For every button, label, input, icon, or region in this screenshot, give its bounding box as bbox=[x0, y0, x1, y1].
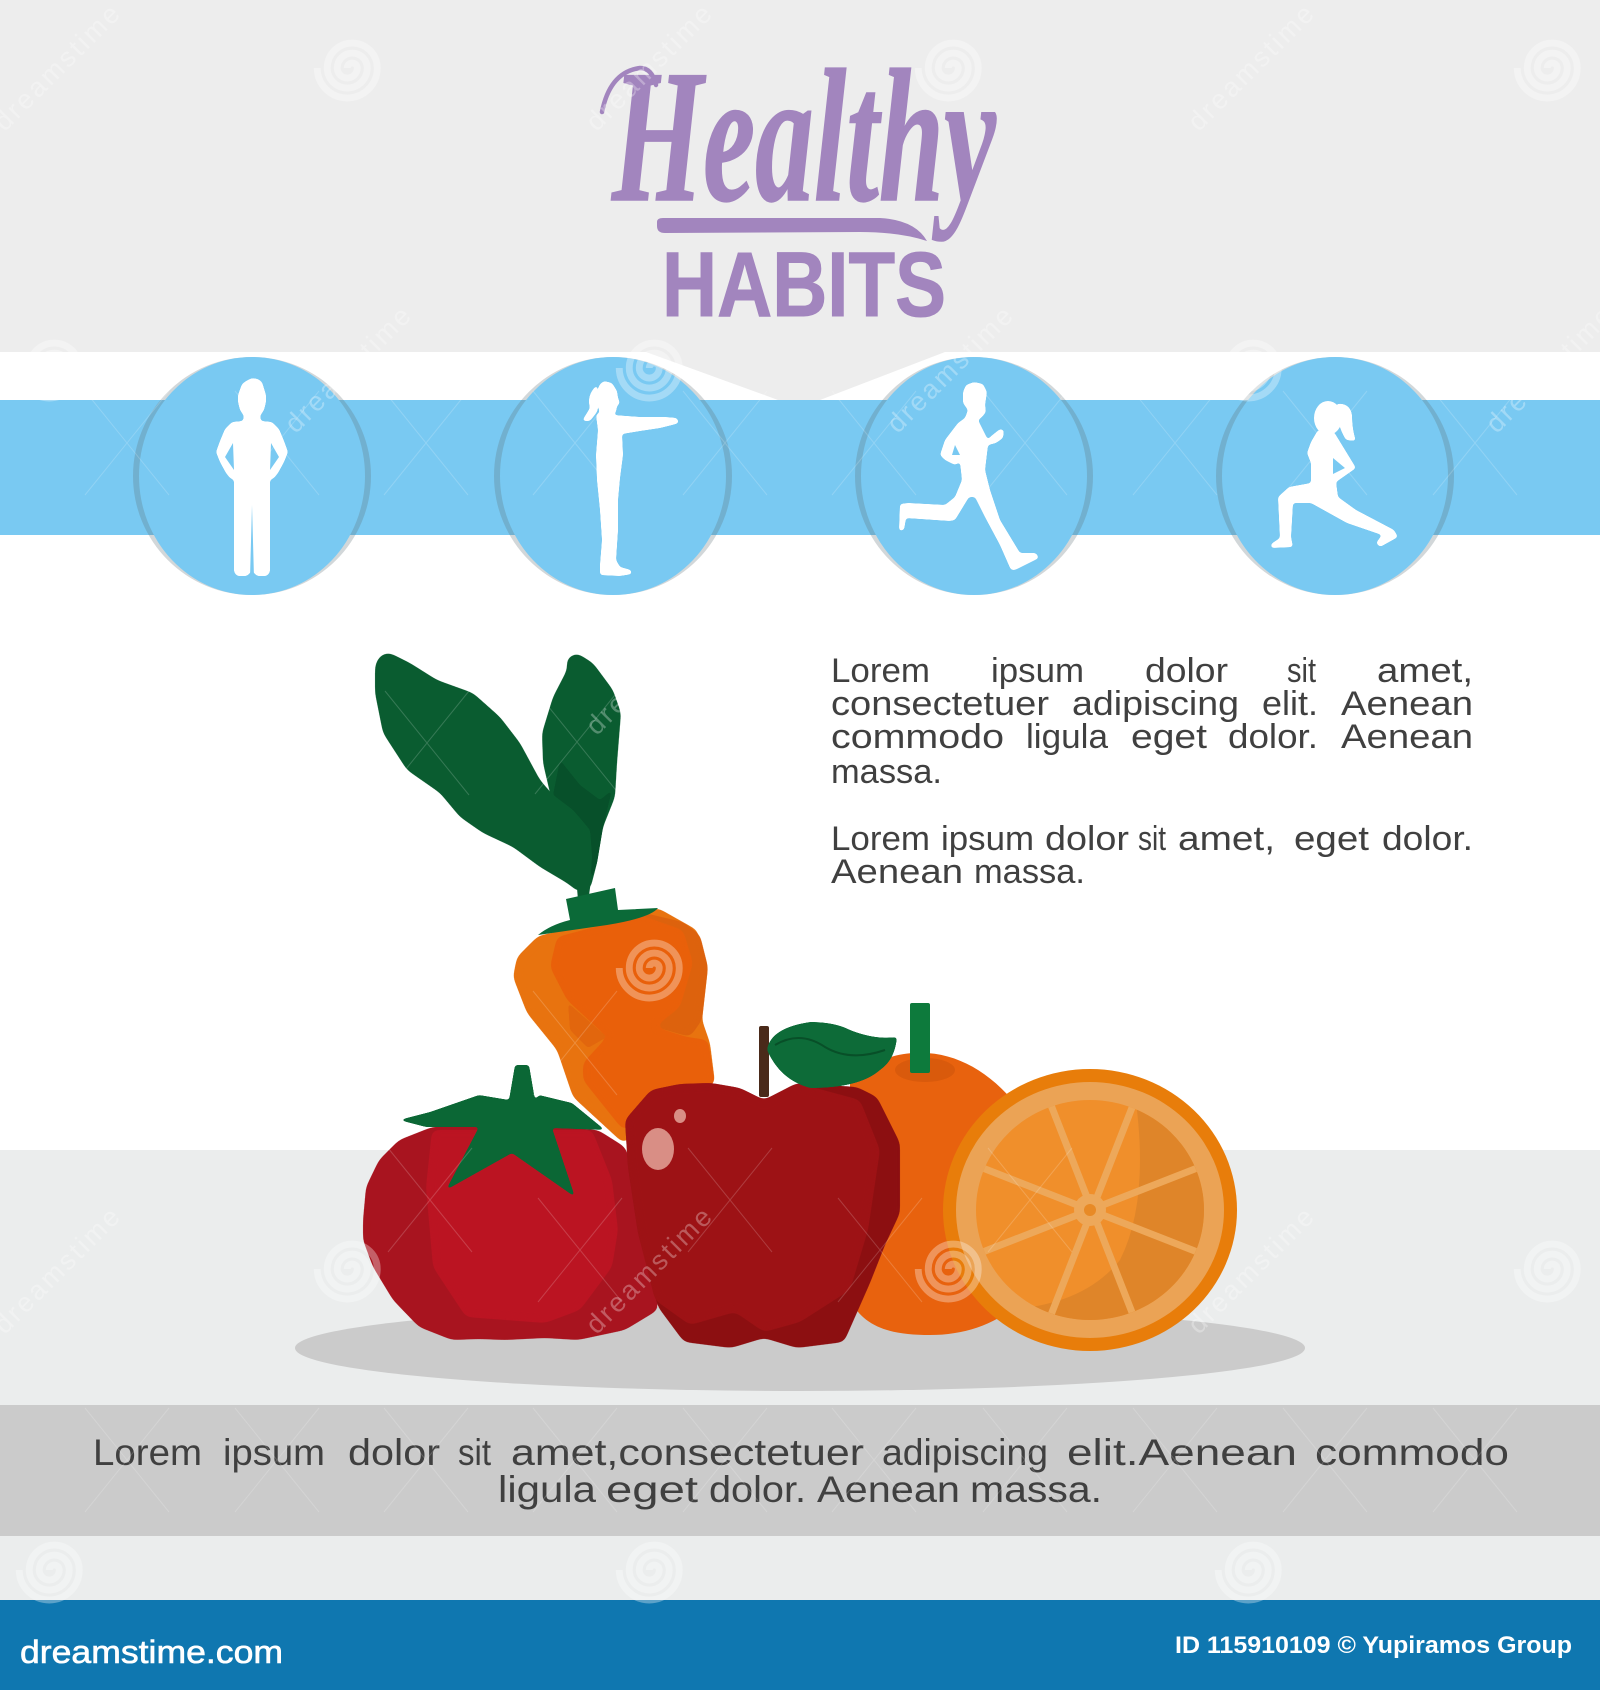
tomato leaves and stem bbox=[399, 1065, 605, 1197]
icon: woman with arms forward bbox=[494, 357, 732, 595]
text block: upper paragraph: sit bbox=[1287, 652, 1316, 690]
caption text: dolor bbox=[348, 1432, 440, 1473]
text block: upper paragraph: Aenean bbox=[1341, 718, 1473, 756]
title bbox=[602, 32, 996, 336]
illustration: apple bbox=[625, 1022, 900, 1348]
caption text: commodo bbox=[1315, 1432, 1509, 1473]
carrot left leaf bbox=[375, 653, 592, 893]
caption text: eget bbox=[606, 1469, 699, 1510]
carrot body bbox=[513, 908, 715, 1143]
caption text: Lorem bbox=[93, 1432, 202, 1473]
text block: upper paragraph bbox=[831, 652, 1473, 791]
caption text: elit.Aenean bbox=[1067, 1432, 1297, 1473]
text block: lower paragraph: amet, bbox=[1178, 820, 1275, 858]
caption text: ipsum bbox=[223, 1432, 325, 1473]
text block: lower paragraph: dolor bbox=[1045, 820, 1129, 858]
watermark layer: dreamstime bbox=[279, 301, 417, 439]
text block: upper paragraph: massa. bbox=[831, 753, 942, 791]
text block: upper paragraph: consectetuer bbox=[831, 685, 1049, 723]
slice spokes bbox=[983, 1106, 1197, 1314]
icon: standing man bbox=[133, 357, 371, 595]
caption text: dolor. bbox=[709, 1469, 806, 1510]
blue band bbox=[0, 400, 1600, 535]
icon: woman lunging bbox=[1216, 357, 1454, 595]
text block: lower paragraph: sit bbox=[1138, 820, 1166, 858]
text block: lower paragraph: massa. bbox=[974, 853, 1085, 891]
plate shadow bbox=[295, 1305, 1305, 1391]
text block: upper paragraph: dolor bbox=[1145, 652, 1228, 690]
text block: upper paragraph: amet, bbox=[1377, 652, 1473, 690]
caption text: ligula bbox=[498, 1469, 596, 1510]
illustration: orange slice bbox=[943, 1069, 1237, 1351]
illustration: orange bbox=[850, 1003, 1060, 1335]
text block: upper paragraph: Lorem bbox=[831, 652, 930, 690]
text block: upper paragraph: dolor. bbox=[1228, 718, 1318, 756]
text block: upper paragraph: adipiscing bbox=[1072, 685, 1239, 723]
text block: lower paragraph bbox=[831, 820, 1473, 891]
carrot right leaf bbox=[542, 653, 621, 890]
background: light gray header bbox=[0, 0, 1600, 352]
header chevron notch bbox=[646, 352, 945, 400]
text block: upper paragraph: Aenean bbox=[1341, 685, 1473, 723]
text block: lower paragraph: ipsum bbox=[941, 820, 1034, 858]
title flourish bbox=[602, 68, 656, 112]
text block: upper paragraph: eget bbox=[1131, 718, 1208, 756]
watermark layer: dreamstime bbox=[1182, 1202, 1320, 1340]
carrot top cap bbox=[538, 888, 658, 935]
title word: HABITS: HABITS bbox=[662, 234, 946, 336]
text block: upper paragraph: ipsum bbox=[991, 652, 1084, 690]
text block: upper paragraph: ligula bbox=[1026, 718, 1108, 756]
title word: Healthy: Healthy bbox=[611, 32, 996, 242]
icon: running man bbox=[855, 357, 1093, 595]
orange stem bbox=[910, 1003, 930, 1073]
illustration: carrot bbox=[375, 653, 715, 1143]
watermark layer: dreamstime bbox=[580, 0, 718, 137]
text block: lower paragraph: eget bbox=[1294, 820, 1370, 858]
text block: lower paragraph: Aenean bbox=[831, 853, 963, 891]
text block: upper paragraph: commodo bbox=[831, 718, 1004, 756]
caption text bbox=[93, 1432, 1509, 1510]
text block: upper paragraph: elit. bbox=[1262, 685, 1318, 723]
title underline swash bbox=[657, 218, 927, 241]
apple leaf bbox=[767, 1022, 897, 1088]
watermark layer: dreamstime bbox=[1182, 0, 1320, 137]
caption text: massa. bbox=[970, 1469, 1102, 1510]
watermark layer: dreamstime bbox=[881, 301, 1019, 439]
footer bar bbox=[0, 1600, 1600, 1690]
text block: lower paragraph: Lorem bbox=[831, 820, 930, 858]
watermark layer: dreamstime bbox=[580, 603, 718, 741]
caption text: adipiscing bbox=[882, 1432, 1048, 1473]
apple highlights bbox=[642, 1128, 674, 1170]
background: light gray floor bbox=[0, 1150, 1600, 1600]
caption text: sit bbox=[458, 1432, 492, 1473]
watermark layer: dreamstime bbox=[580, 1202, 718, 1340]
caption text: Aenean bbox=[817, 1469, 960, 1510]
footer credit text: ID 115910109 © Yupiramos Group bbox=[1175, 1632, 1572, 1659]
illustration: tomato bbox=[363, 1065, 658, 1340]
apple stem bbox=[759, 1026, 769, 1097]
text block: lower paragraph: dolor. bbox=[1382, 820, 1473, 858]
gray caption strip bbox=[0, 1405, 1600, 1536]
background: white middle section bbox=[0, 352, 1600, 1150]
footer logo text: dreamstime.com bbox=[20, 1634, 283, 1670]
caption text: amet,consectetuer bbox=[511, 1432, 864, 1473]
